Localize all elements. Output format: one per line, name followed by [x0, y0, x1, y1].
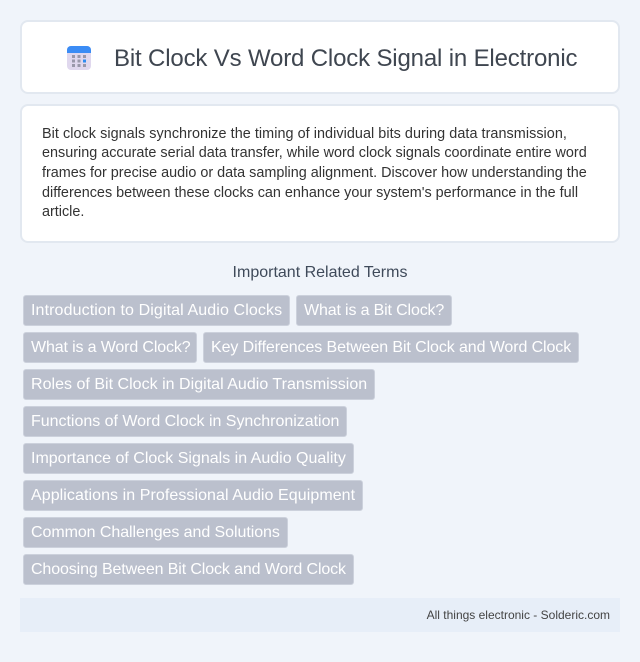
tag: Common Challenges and Solutions: [31, 524, 280, 541]
tag: Applications in Professional Audio Equipment: [31, 487, 355, 504]
tag: [23, 443, 354, 474]
summary text: Bit clock signals synchronize the timing of individual bits during data transmission,: [42, 126, 567, 142]
tag: [23, 369, 375, 400]
footer bar: All things electronic - Solderic.com: [427, 608, 610, 622]
tag: Importance of Clock Signals in Audio Quality: [31, 450, 346, 467]
panel: summary: [20, 104, 620, 243]
tag: [23, 295, 290, 326]
tag: [23, 554, 354, 585]
tag: [23, 517, 288, 548]
tag: Choosing Between Bit Clock and Word Clock: [31, 561, 346, 578]
summary text: differences between these clocks can enhance your system's performance in the full: [42, 185, 578, 201]
tag: What is a Bit Clock?: [304, 302, 444, 319]
tag: Key Differences Between Bit Clock and Word Clock: [211, 339, 571, 356]
icon: calendar: [67, 46, 91, 70]
title: Bit Clock Vs Word Clock Signal in Electronic: [114, 45, 577, 72]
tag: [23, 332, 197, 363]
heading: related terms: Important Related Terms: [233, 264, 407, 281]
tag: [296, 295, 452, 326]
footer bar: [20, 598, 620, 632]
tag: [23, 480, 363, 511]
summary text: ensuring accurate serial data transfer, while word clock signals coordinate entire word: [42, 145, 587, 161]
tag: Roles of Bit Clock in Digital Audio Transmission: [31, 376, 367, 393]
tag: [203, 332, 579, 363]
tag: Introduction to Digital Audio Clocks: [31, 302, 282, 319]
summary text: frames for precise audio or data sampling alignment. Discover how understanding the: [42, 165, 587, 181]
tag: [23, 406, 347, 437]
tag: Functions of Word Clock in Synchronization: [31, 413, 339, 430]
title panel: [20, 20, 620, 94]
summary text: article.: [42, 204, 84, 220]
tag: What is a Word Clock?: [31, 339, 190, 356]
summary text: [42, 126, 587, 220]
